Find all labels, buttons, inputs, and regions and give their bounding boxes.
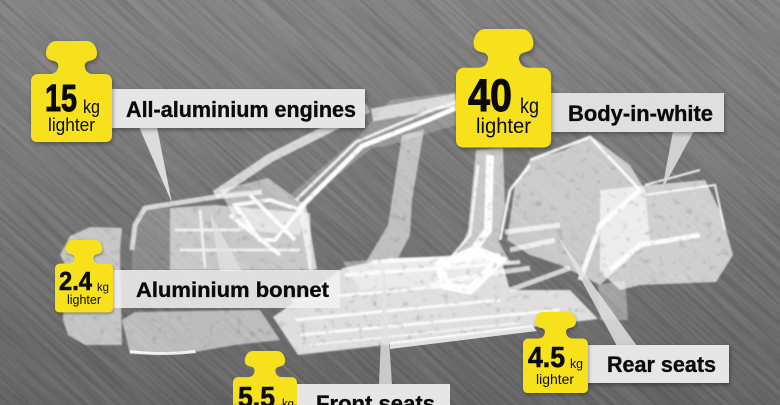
weight badge: 4.5 kg lighter: kg	[570, 356, 583, 371]
weight badge: 40 kg lighter: 40	[468, 70, 512, 121]
label: aluminium bonnet: Aluminium bonnet	[136, 279, 329, 302]
floor sill highlight	[390, 325, 537, 349]
weight badge: 2.4 kg lighter: kg	[97, 280, 109, 294]
weight badge: 15 kg lighter	[31, 41, 112, 142]
weight badge: 4.5 kg lighter	[523, 312, 588, 393]
label: all-aluminium engines: All-aluminium engines	[126, 97, 356, 122]
callout: body-in-white	[551, 93, 724, 190]
front tray edge highlight	[130, 350, 196, 355]
weight badge: 2.4 kg lighter: 2.4	[59, 266, 92, 296]
label: all-aluminium engines	[112, 89, 365, 128]
label: body-in-white	[551, 93, 724, 132]
weight badge: 40 kg lighter: kg	[520, 95, 539, 118]
callout: rear seats	[557, 235, 729, 383]
car body structure x-ray	[60, 92, 733, 355]
weight badge: 4.5 kg lighter: 4.5	[528, 342, 565, 374]
callout: aluminium bonnet	[113, 213, 340, 308]
label: front seats	[297, 384, 450, 405]
label: rear seats	[588, 345, 729, 383]
callout: all-aluminium engines	[112, 89, 365, 203]
weight badge: 5.5 kg (cropped by the frame)	[233, 351, 297, 405]
weight badge: 2.4 kg lighter: lighter	[67, 292, 102, 307]
weight badge: 15 kg lighter: 15	[45, 78, 77, 120]
callout: front seats	[297, 263, 450, 405]
label: aluminium bonnet	[113, 270, 340, 308]
weight badge: 15 kg lighter: kg	[83, 97, 100, 117]
weight badge: 40 kg lighter	[456, 29, 551, 147]
label: rear seats: Rear seats	[607, 352, 716, 377]
weight badge: 15 kg lighter: lighter	[48, 115, 95, 135]
weight badge: 4.5 kg lighter: lighter	[536, 371, 574, 387]
weight badge: 40 kg lighter: lighter	[476, 115, 531, 138]
label: body-in-white: Body-in-white	[568, 101, 713, 126]
weight badge: 2.4 kg lighter	[55, 240, 113, 312]
